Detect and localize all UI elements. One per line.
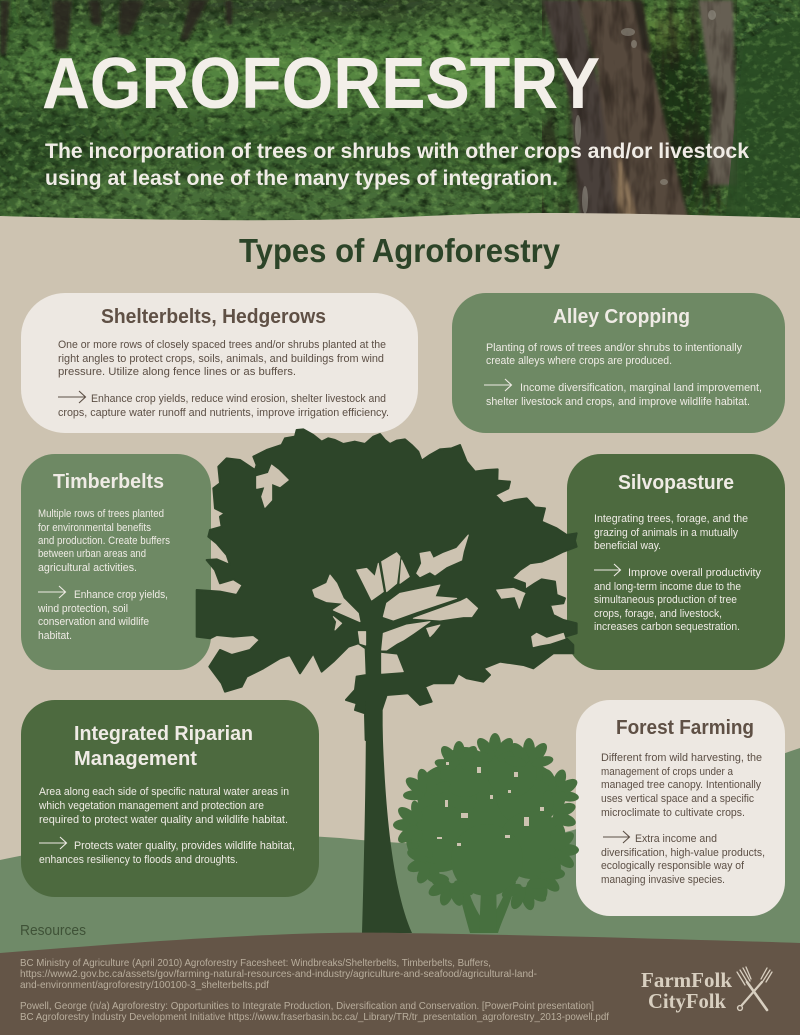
panel: Silvopasture: grazing of animals in a mutually bbox=[594, 527, 738, 539]
subtitle bbox=[45, 140, 749, 190]
panel: Forest Farming: uses vertical space and a specific bbox=[601, 793, 754, 805]
panel: Forest Farming bbox=[576, 700, 785, 916]
subtitle: using at least one of the many types of integration. bbox=[45, 167, 558, 190]
panel: Timberbelts bbox=[21, 454, 211, 670]
panel: Forest Farming: diversification, high-value products, bbox=[601, 847, 765, 859]
subtitle: The incorporation of trees or shrubs with other crops and/or livestock bbox=[45, 140, 749, 163]
panel: Integrated Riparian Management: Area along each side of specific natural water areas in bbox=[39, 786, 289, 798]
panel: Silvopasture bbox=[567, 454, 785, 670]
panel: Forest Farming: Forest Farming bbox=[616, 717, 754, 739]
resources list: Powell, George (n/a) Agroforestry: Opportunities to Integrate Production, Diversification and Conservation. [PowerPoint presentation] bbox=[20, 1001, 594, 1012]
panel: Integrated Riparian Management: Protects water quality, provides wildlife habitat, bbox=[74, 840, 295, 852]
panel: Integrated Riparian Management: Management bbox=[74, 748, 197, 770]
panel: Silvopasture: Improve overall productivity bbox=[628, 567, 761, 579]
panel: Silvopasture: beneficial way. bbox=[594, 540, 661, 552]
panel: Silvopasture: Integrating trees, forage, and the bbox=[594, 513, 748, 525]
panel: Alley Cropping: shelter livestock and crops, and improve wildlife habitat. bbox=[486, 396, 750, 408]
logo: FarmFolk CityFolk: FarmFolk bbox=[641, 968, 732, 992]
brown footer band bbox=[0, 933, 800, 1035]
hills bbox=[0, 748, 800, 1035]
panel: Silvopasture: Silvopasture bbox=[618, 472, 734, 494]
panel: Timberbelts: and production. Create buffers bbox=[38, 535, 170, 547]
panel: Timberbelts: between urban areas and bbox=[38, 548, 146, 560]
panel: Timberbelts: for environmental benefits bbox=[38, 522, 151, 534]
panel: Timberbelts: wind protection, soil bbox=[37, 603, 128, 615]
header forest photo bbox=[0, 0, 800, 230]
panel: Integrated Riparian Management: which vegetation management and protection are bbox=[38, 800, 264, 812]
panel: Forest Farming: Different from wild harvesting, the bbox=[601, 752, 762, 764]
panel: Timberbelts: habitat. bbox=[38, 630, 72, 642]
panel: Forest Farming: managed tree canopy. Intentionally bbox=[601, 779, 761, 791]
beige ground bbox=[0, 213, 800, 1035]
panel: Timberbelts: agricultural activities. bbox=[38, 562, 137, 574]
panel: Forest Farming: managing invasive species. bbox=[601, 874, 725, 886]
panel: Alley Cropping: Income diversification, marginal land improvement, bbox=[520, 382, 762, 394]
panel: Alley Cropping: create alleys where crops are produced. bbox=[486, 355, 672, 367]
panel: Alley Cropping bbox=[452, 293, 785, 433]
panel: Shelterbelts, Hedgerows: Shelterbelts, Hedgerows bbox=[101, 306, 326, 328]
panel: Alley Cropping: Alley Cropping bbox=[553, 306, 690, 328]
panel: Timberbelts: Enhance crop yields, bbox=[74, 589, 168, 601]
panel: Timberbelts: Timberbelts bbox=[53, 471, 164, 493]
panel: Forest Farming: Extra income and bbox=[635, 833, 717, 845]
panel: Alley Cropping: Planting of rows of trees and/or shrubs to intentionally bbox=[486, 342, 742, 354]
logo: FarmFolk CityFolk: CityFolk bbox=[648, 989, 726, 1013]
panel: Shelterbelts, Hedgerows: pressure. Utilize along fence lines or as buffers. bbox=[58, 366, 296, 378]
panel: Silvopasture: increases carbon sequestration. bbox=[594, 621, 740, 633]
panel: Shelterbelts, Hedgerows: Enhance crop yields, reduce wind erosion, shelter livestock and bbox=[91, 393, 386, 405]
panel: Integrated Riparian Management: required to protect water quality and wildlife habitat. bbox=[39, 814, 288, 826]
panel: Timberbelts: conservation and wildlife bbox=[38, 616, 149, 628]
title: AGROFORESTRY bbox=[42, 44, 600, 124]
panel: Shelterbelts, Hedgerows: crops, capture water runoff and nutrients, improve irrigation efficiency. bbox=[58, 407, 389, 419]
logo: FarmFolk CityFolk bbox=[641, 967, 772, 1013]
resources list: BC Ministry of Agriculture (April 2010) Agroforestry Facesheet: Windbreaks/Shelterbelts, Timberbelts, Buffers, bbox=[20, 958, 491, 969]
resources list: and-environment/agroforestry/100100-3_shelterbelts.pdf bbox=[20, 980, 269, 991]
resources list: https://www2.gov.bc.ca/assets/gov/farming-natural-resources-and-industry/agriculture-and-seafood/agricultural-land- bbox=[20, 969, 537, 980]
panel: Shelterbelts, Hedgerows bbox=[21, 293, 418, 433]
panel: Silvopasture: simultaneous production of tree bbox=[594, 594, 737, 606]
resources heading: Resources bbox=[20, 923, 86, 939]
panel: Forest Farming: ecologically responsible way of bbox=[601, 860, 745, 872]
panel: Timberbelts: Multiple rows of trees planted bbox=[38, 508, 164, 520]
panel: Integrated Riparian Management: enhances resiliency to floods and droughts. bbox=[39, 854, 238, 866]
panel: Integrated Riparian Management: Integrated Riparian bbox=[74, 723, 253, 745]
icon: shrub bbox=[393, 733, 587, 933]
resources list bbox=[20, 958, 609, 1023]
resources list: BC Agroforestry Industry Development Initiative https://www.fraserbasin.bc.ca/_Library/TR/tr_presentation_agroforestry_2013-powell.pdf bbox=[20, 1012, 609, 1023]
panel: Forest Farming: management of crops under a bbox=[601, 766, 734, 778]
panel: Shelterbelts, Hedgerows: right angles to protect crops, soils, animals, and buildings from wind bbox=[58, 353, 384, 365]
panel: Shelterbelts, Hedgerows: One or more rows of closely spaced trees and/or shrubs planted at the bbox=[58, 339, 386, 351]
panel: Integrated Riparian Management bbox=[21, 700, 319, 897]
section heading: Types of Agroforestry bbox=[239, 232, 561, 269]
icon: large tree silhouette bbox=[197, 429, 577, 933]
panel: Silvopasture: crops, forage, and livestock, bbox=[594, 608, 722, 620]
panel: Forest Farming: microclimate to cultivate crops. bbox=[601, 807, 745, 819]
panel: Silvopasture: and long-term income due to the bbox=[594, 581, 741, 593]
